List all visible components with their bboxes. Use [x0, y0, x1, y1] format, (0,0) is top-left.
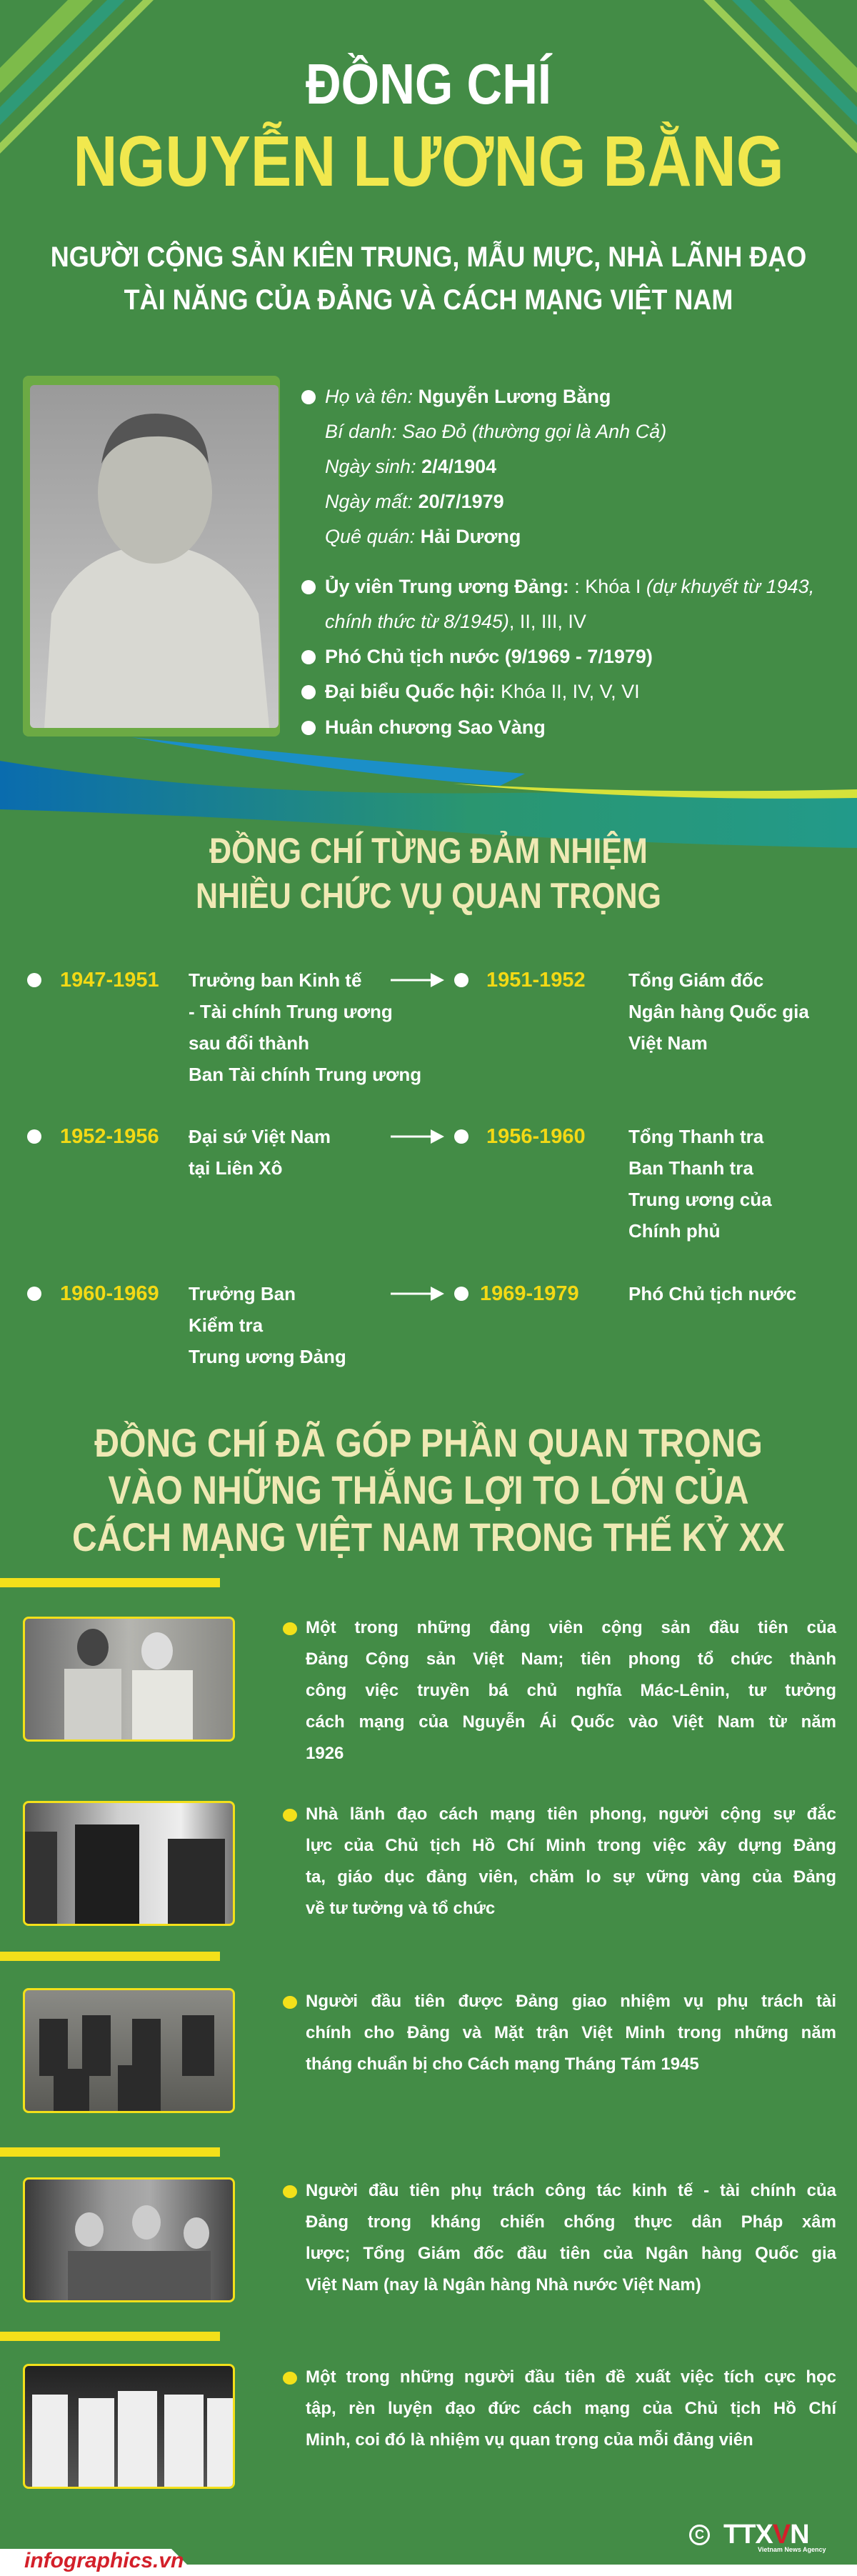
title: NGUYỄN LƯƠNG BẰNG: [73, 121, 784, 201]
timeline: Tổng Thanh tra: [628, 1126, 763, 1147]
row 2: [27, 1129, 41, 1144]
timeline: 1952-1956: [60, 1125, 159, 1148]
achievement 3: chính cho Đảng và Mặt trận Việt Minh trong những năm: [306, 2023, 836, 2042]
title: ĐỒNG CHÍ: [306, 52, 551, 116]
footer white strip: [0, 2549, 857, 2576]
timeline: Kiểm tra: [189, 1314, 263, 1336]
section heading: positions: [196, 831, 661, 916]
logo: TTXVN: C: [695, 2527, 704, 2542]
section heading: positions: ĐỒNG CHÍ TỪNG ĐẢM NHIỆM: [209, 831, 648, 871]
timeline: 1951-1952: [486, 969, 586, 992]
achievement 2: lực của Chủ tịch Hồ Chí Minh trong việc xây dựng Đảng: [306, 1836, 836, 1855]
section heading: contributions: VÀO NHỮNG THẮNG LỢI TO LỚN CỦA: [108, 1467, 749, 1512]
achievement 3: tháng chuẩn bị cho Cách mạng Tháng Tám 1945: [306, 2055, 699, 2074]
profile info list: Quê quán: Hải Dương: [325, 526, 521, 547]
timeline: Trưởng ban Kinh tế: [189, 969, 361, 991]
timeline: 1947-1951: [60, 969, 159, 992]
row 3: [27, 1287, 41, 1301]
achievement 4: Người đầu tiên phụ trách công tác kinh tế - tài chính của: [306, 2181, 836, 2200]
timeline: Phó Chủ tịch nước: [628, 1283, 796, 1304]
section heading: contributions: CÁCH MẠNG VIỆT NAM TRONG THẾ KỶ XX: [72, 1514, 785, 1559]
footer: infographics.vn: infographics.vn: [24, 2549, 184, 2572]
logo: TTXVN: Vietnam News Agency: [758, 2546, 826, 2553]
section heading: positions: NHIỀU CHỨC VỤ QUAN TRỌNG: [196, 876, 661, 916]
achievement 1: Đảng Cộng sản Việt Nam; tiên phong tổ chức thành: [306, 1649, 836, 1669]
achievement 3: Người đầu tiên được Đảng giao nhiệm vụ phụ trách tài: [306, 1992, 836, 2011]
achievement 1: Một trong những đảng viên cộng sản đầu tiên của: [306, 1618, 836, 1637]
profile info list: [301, 386, 814, 738]
timeline: Ngân hàng Quốc gia: [628, 1001, 809, 1022]
subtitle: [51, 241, 806, 316]
section heading: contributions: [72, 1420, 785, 1559]
achievement 2: Nhà lãnh đạo cách mạng tiên phong, người cộng sự đắc: [306, 1804, 836, 1824]
title: [73, 52, 784, 201]
decorative corner stripes: [0, 0, 857, 154]
achievement 5: Minh, coi đó là nhiệm vụ quan trọng của mỗi đảng viên: [306, 2430, 753, 2450]
timeline: Trưởng Ban: [189, 1283, 296, 1304]
section heading: contributions: ĐỒNG CHÍ ĐÃ GÓP PHẦN QUAN TRỌNG: [94, 1420, 763, 1465]
timeline: Trung ương của: [628, 1189, 772, 1210]
achievement 2: ta, giáo dục đảng viên, chăm lo sự vững vàng của Đảng: [306, 1867, 836, 1887]
achievement 1: [23, 1617, 837, 1763]
subtitle: NGƯỜI CỘNG SẢN KIÊN TRUNG, MẪU MỰC, NHÀ LÃNH ĐẠO: [51, 241, 806, 273]
text: Trung ương Đảng: [189, 1346, 346, 1367]
timeline: 1969-1979: [480, 1282, 579, 1305]
timeline: [27, 969, 809, 1367]
timeline: Đại sứ Việt Nam: [189, 1126, 331, 1147]
timeline: Tổng Giám đốc: [628, 969, 763, 991]
logo: TTXVN: TTXVN: [723, 2520, 809, 2550]
achievement 5: Một trong những người đầu tiên đề xuất việc tích cực học: [306, 2367, 836, 2387]
achievement 2: về tư tưởng và tổ chức: [306, 1899, 495, 1918]
profile info list: Đại biểu Quốc hội: Khóa II, IV, V, VI: [325, 681, 640, 702]
profile info list: Ủy viên Trung ương Đảng: : Khóa I (dự khuyết từ 1943,: [325, 576, 814, 597]
profile info list: Bí danh: Sao Đỏ (thường gọi là Anh Cả): [325, 421, 666, 442]
portrait photo: [23, 376, 280, 737]
profile info list: Họ và tên: Nguyễn Lương Bằng: [325, 386, 611, 407]
profile info list: Huân chương Sao Vàng: [325, 717, 546, 738]
timeline: sau đổi thành: [189, 1032, 309, 1054]
decorative wave: [0, 737, 857, 848]
achievement 5: tập, rèn luyện đạo đức cách mạng của Chủ tịch Hồ Chí: [306, 2399, 836, 2418]
achievement 3: [23, 1988, 836, 2113]
timeline: tại Liên Xô: [189, 1157, 282, 1179]
timeline: 1956-1960: [486, 1125, 586, 1148]
profile info list: Ngày mất: 20/7/1979: [325, 491, 504, 512]
achievement 4: Việt Nam (nay là Ngân hàng Nhà nước Việt Nam): [306, 2275, 701, 2295]
achievement 5: [23, 2364, 837, 2489]
profile info list: Ngày sinh: 2/4/1904: [325, 456, 496, 477]
profile info list: Phó Chủ tịch nước (9/1969 - 7/1979): [325, 646, 653, 667]
achievement 4: [23, 2177, 837, 2302]
achievement 1: công việc truyền bá chủ nghĩa Mác-Lênin, tư tưởng: [306, 1681, 836, 1700]
profile info list: chính thức từ 8/1945), II, III, IV: [325, 611, 586, 632]
achievement 1: cách mạng của Nguyễn Ái Quốc vào Việt Nam từ năm: [306, 1712, 836, 1732]
logo: TTXVN: [689, 2520, 826, 2553]
subtitle: TÀI NĂNG CỦA ĐẢNG VÀ CÁCH MẠNG VIỆT NAM: [124, 284, 733, 316]
row 1: [27, 973, 41, 987]
achievement 1: 1926: [306, 1744, 344, 1763]
timeline: Ban Thanh tra: [628, 1157, 753, 1179]
achievement 4: Đảng trong kháng chiến chống thực dân Pháp xâm: [306, 2212, 836, 2232]
timeline: Chính phủ: [628, 1220, 721, 1242]
timeline: Ban Tài chính Trung ương: [189, 1064, 421, 1085]
achievement 2: [23, 1801, 836, 1926]
timeline: Việt Nam: [628, 1032, 708, 1054]
achievement 4: lược; Tổng Giám đốc đầu tiên của Ngân hàng Quốc gia: [306, 2244, 836, 2263]
timeline: 1960-1969: [60, 1282, 159, 1305]
timeline: - Tài chính Trung ương: [189, 1001, 393, 1022]
